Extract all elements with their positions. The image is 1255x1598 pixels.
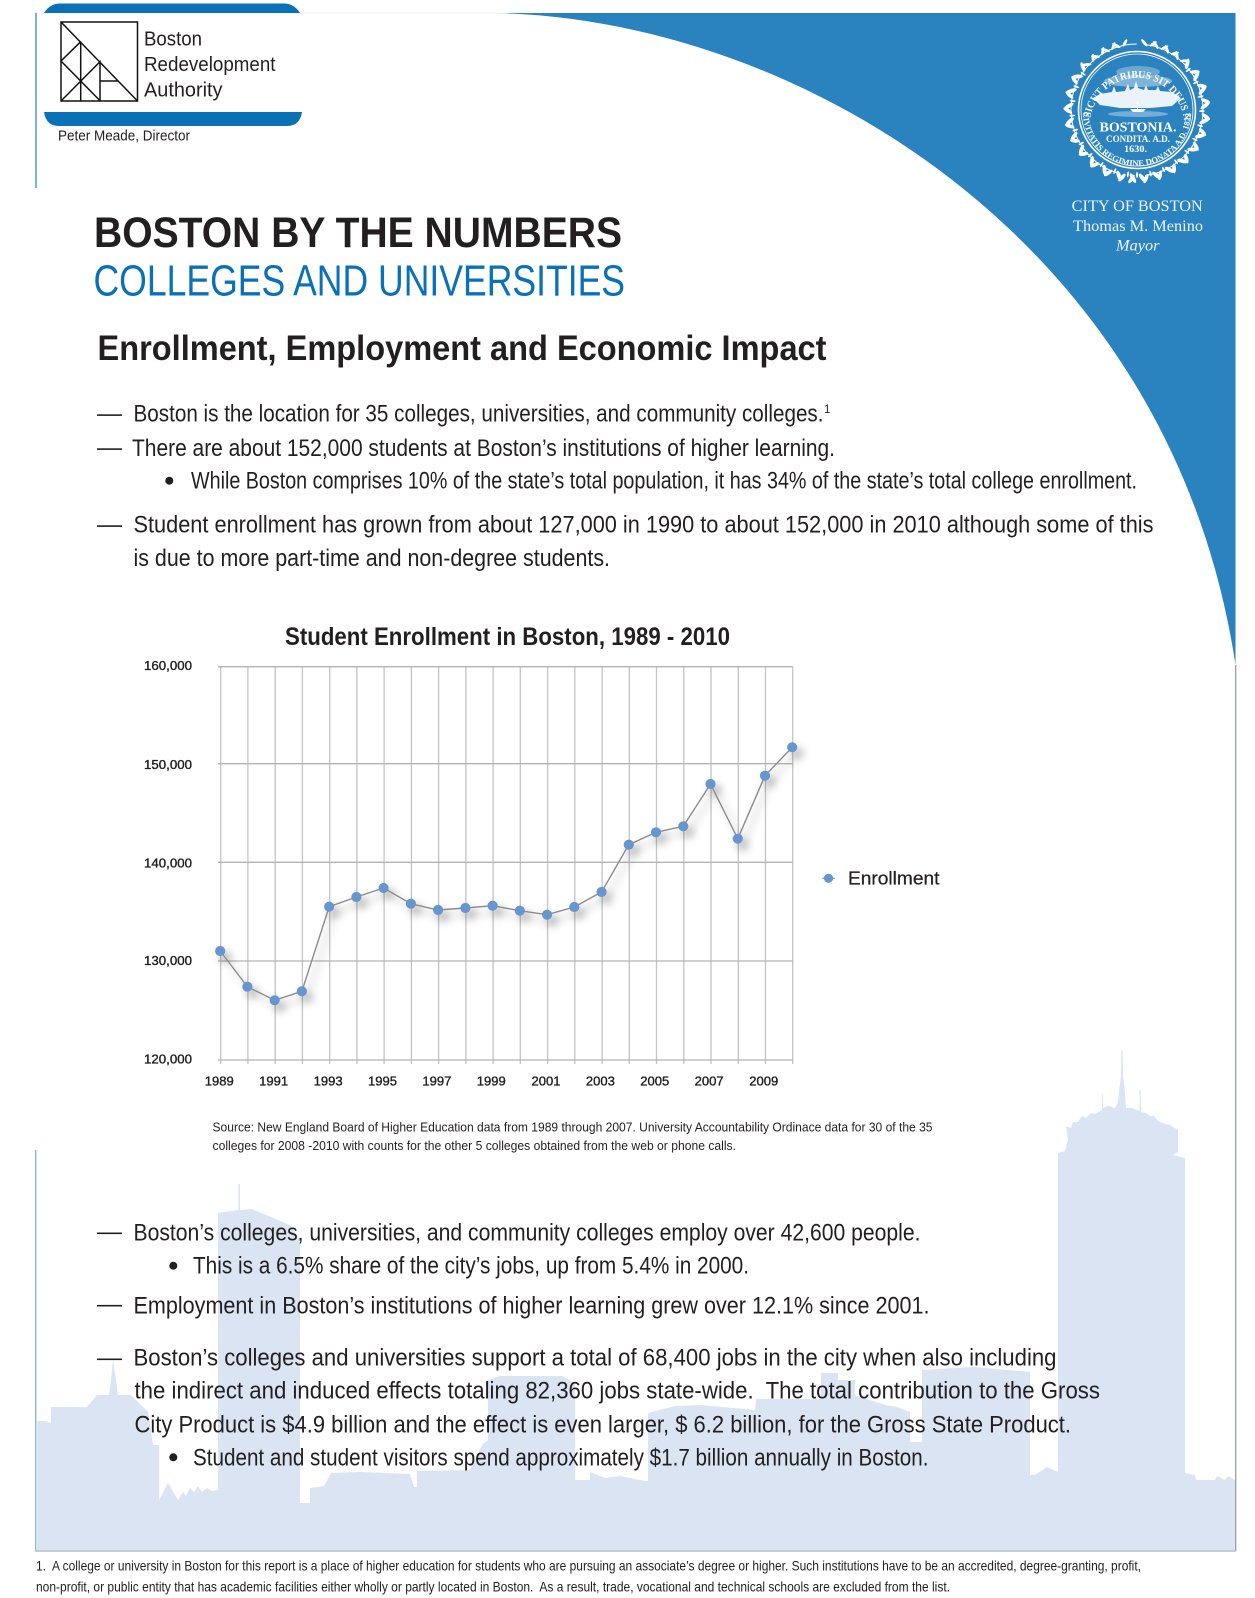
text block: employment and economic impact: City Product is $4.9 billion and the effect is even larger, $ 6.2 billion, for the Gross State Product. bbox=[134, 1412, 1071, 1439]
logo bottom band bbox=[44, 112, 302, 126]
text block: enrollment facts: 1 bbox=[824, 404, 830, 416]
heading: Enrollment, Employment and Economic Impact bbox=[98, 329, 827, 368]
text block: employment and economic impact: Employment in Boston’s institutions of higher learning grew over 12.1% since 2001. bbox=[134, 1292, 930, 1319]
text block: employment and economic impact: This is a 6.5% share of the city’s jobs, up from 5.4% in 2000. bbox=[193, 1252, 749, 1279]
x axis labels: 1989 bbox=[205, 1075, 234, 1089]
y axis labels: 130,000 bbox=[144, 954, 192, 968]
skyline silhouette background bbox=[37, 1050, 1235, 1550]
y axis labels: 150,000 bbox=[144, 758, 192, 772]
subtitle: COLLEGES AND UNIVERSITIES bbox=[94, 256, 625, 306]
chart source note: colleges for 2008 -2010 with counts for the other 5 colleges obtained from the web or phone calls. bbox=[212, 1138, 736, 1153]
text block: enrollment facts: Boston is the location for 35 colleges, universities, and community colleges. bbox=[134, 401, 824, 428]
y axis labels: 160,000 bbox=[144, 659, 192, 673]
chart source note bbox=[212, 1120, 932, 1153]
chart title: Student Enrollment in Boston, 1989 - 2010 bbox=[285, 623, 730, 651]
line chart: student enrollment bbox=[144, 659, 940, 1089]
x axis labels: 1999 bbox=[477, 1075, 506, 1089]
mayor credit: Mayor bbox=[1115, 238, 1161, 255]
title: BOSTON BY THE NUMBERS bbox=[94, 209, 622, 257]
logo block: Boston Redevelopment Authority bbox=[44, 4, 302, 145]
text block: employment and economic impact: Student and student visitors spend approximately $1.7 billion annually in Boston. bbox=[193, 1445, 928, 1472]
seal city view bbox=[1093, 66, 1181, 117]
logo top band bbox=[44, 4, 300, 13]
chart legend: Enrollment bbox=[848, 868, 940, 888]
logo wordmark: Boston bbox=[144, 28, 202, 51]
x axis labels: 2003 bbox=[586, 1075, 615, 1089]
text block: employment and economic impact: the indirect and induced effects totaling 82,360 jobs state-wide. The total contribution to the Gross bbox=[134, 1377, 1100, 1404]
logo wordmark: Authority bbox=[144, 78, 223, 101]
y axis labels: 120,000 bbox=[144, 1053, 192, 1067]
logo wordmark: Redevelopment bbox=[144, 53, 276, 76]
y axis labels bbox=[144, 659, 192, 1067]
y axis labels: 140,000 bbox=[144, 857, 192, 871]
text block: enrollment facts: There are about 152,000 students at Boston’s institutions of higher learning. bbox=[132, 435, 835, 462]
text block: enrollment facts: Student enrollment has grown from about 127,000 in 1990 to about 152,000 in 2010 although some of this bbox=[134, 512, 1154, 539]
mayor credit bbox=[1072, 198, 1203, 255]
mayor credit: CITY OF BOSTON bbox=[1072, 198, 1203, 215]
seal rings bbox=[1078, 52, 1196, 168]
icon: BRA square mark bbox=[61, 22, 138, 101]
x axis labels: 2009 bbox=[749, 1075, 778, 1089]
panel: blue curved corner bbox=[497, 13, 1236, 665]
mayor credit: Thomas M. Menino bbox=[1073, 218, 1203, 235]
seal name: CONDITA. A.D. bbox=[1106, 135, 1170, 145]
director credit: Peter Meade, Director bbox=[58, 128, 190, 145]
text block: employment and economic impact bbox=[97, 1220, 1100, 1472]
text block: employment and economic impact: Boston’s colleges, universities, and community colleges employ over 42,600 people. bbox=[134, 1220, 920, 1247]
text block: employment and economic impact: Boston’s colleges and universities support a total of 68,400 jobs in the city when also including bbox=[134, 1344, 1056, 1371]
seal name: 1630. bbox=[1124, 144, 1147, 154]
seal name bbox=[1100, 120, 1176, 154]
x axis labels: 1991 bbox=[259, 1075, 288, 1089]
chart grid bbox=[218, 667, 793, 1064]
x axis labels: 1995 bbox=[368, 1075, 397, 1089]
logo wordmark bbox=[144, 28, 276, 101]
text block: enrollment facts: is due to more part-time and non-degree students. bbox=[134, 545, 610, 572]
x axis labels: 1997 bbox=[422, 1075, 451, 1089]
x axis labels: 2007 bbox=[695, 1075, 724, 1089]
text block: enrollment facts bbox=[97, 401, 1154, 572]
icon: City of Boston seal bbox=[1063, 39, 1210, 184]
seal name: BOSTONIA. bbox=[1100, 120, 1176, 135]
x axis labels bbox=[205, 1075, 778, 1089]
chart source note: Source: New England Board of Higher Education data from 1989 through 2007. University Accountability Ordinace data for 30 of the 35 bbox=[212, 1120, 932, 1134]
footnote: non-profit, or public entity that has academic facilities either wholly or partly located in Boston. As a result, trade, vocational and technical schools are excluded from the list. bbox=[36, 1578, 950, 1594]
x axis labels: 2005 bbox=[640, 1075, 669, 1089]
seal charter text: CIVITATIS REGIMINE DONATA A.D. 1822 bbox=[1083, 112, 1191, 166]
x axis labels: 1993 bbox=[314, 1075, 343, 1089]
footnote bbox=[36, 1558, 1141, 1594]
seal wreath bbox=[1062, 35, 1212, 185]
enrollment series bbox=[215, 742, 797, 1005]
x axis labels: 2001 bbox=[532, 1075, 561, 1089]
